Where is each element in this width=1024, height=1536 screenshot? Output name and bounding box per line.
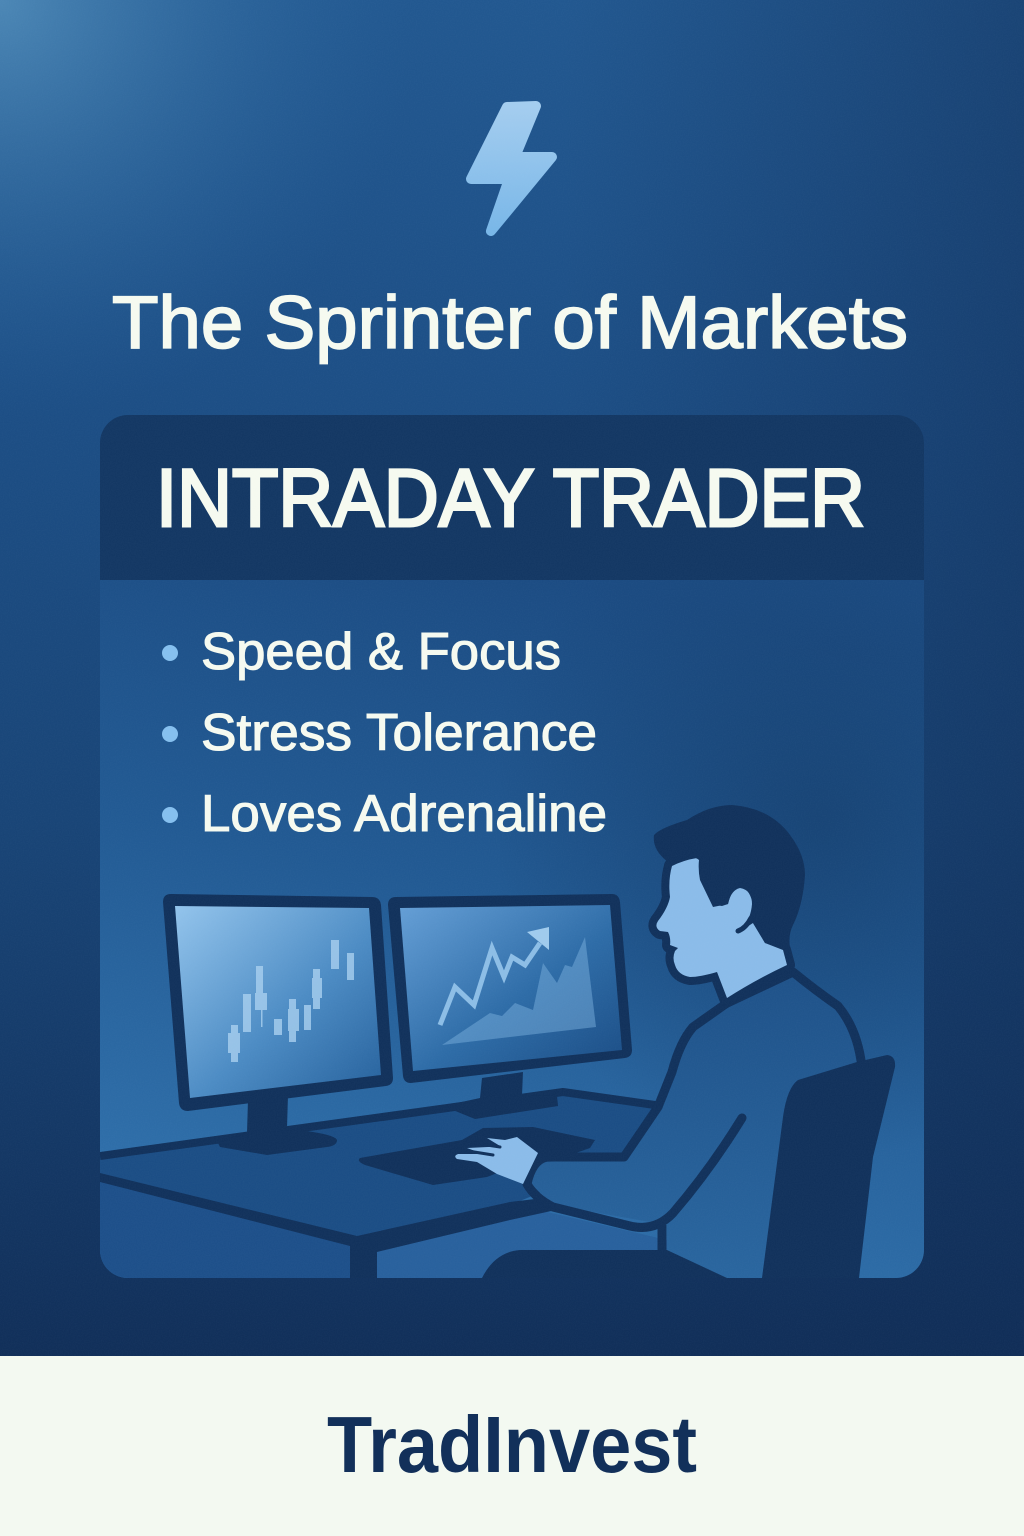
panel header bbox=[100, 415, 924, 580]
hair bbox=[654, 805, 805, 948]
hand bbox=[455, 1137, 538, 1184]
title: The Sprinter of Markets bbox=[112, 281, 908, 364]
desk front left bbox=[100, 1180, 350, 1278]
bullet list bbox=[162, 623, 607, 843]
desk front right bbox=[377, 1208, 667, 1278]
bullet: loves adrenaline bbox=[162, 793, 606, 832]
screen bbox=[400, 905, 622, 1071]
monitor: candlestick chart bbox=[163, 894, 393, 1155]
heading: INTRADAY TRADER bbox=[156, 453, 865, 544]
head bbox=[654, 805, 805, 998]
screen bbox=[175, 906, 381, 1098]
trader bbox=[455, 805, 895, 1278]
icon: lightning bolt bbox=[471, 106, 552, 231]
frame bbox=[388, 894, 632, 1083]
bullet: stress tolerance: Stress Tolerance bbox=[201, 704, 597, 762]
desk top bbox=[100, 1092, 655, 1240]
chair bbox=[762, 1055, 895, 1278]
sleeve outline bbox=[527, 1003, 742, 1227]
frame bbox=[163, 894, 393, 1111]
panel body bbox=[100, 580, 924, 1278]
panel right shading bbox=[594, 655, 924, 1060]
stand bbox=[456, 1072, 558, 1119]
monitor: line chart bbox=[388, 894, 632, 1119]
torso bbox=[532, 1086, 779, 1278]
seat bbox=[482, 1250, 727, 1278]
trend arrowhead bbox=[527, 927, 549, 950]
face and neck bbox=[656, 858, 787, 998]
bullet: loves adrenaline: Loves Adrenaline bbox=[201, 785, 607, 843]
shoulder outline bbox=[723, 972, 862, 1068]
stand bbox=[218, 1095, 337, 1155]
trend line bbox=[440, 943, 540, 1025]
desk leg bbox=[350, 1250, 377, 1278]
footer band bbox=[0, 1356, 1024, 1536]
area chart bbox=[442, 937, 596, 1045]
ear inner bbox=[738, 918, 751, 931]
candles bbox=[228, 940, 354, 1062]
waist line bbox=[658, 1225, 666, 1252]
desk back edge bbox=[100, 1092, 655, 1156]
desk front edge right bbox=[354, 1199, 551, 1252]
desk front edge left bbox=[100, 1173, 357, 1246]
keyboard bbox=[359, 1127, 595, 1185]
panel: intraday trader bbox=[100, 415, 924, 1280]
desk bbox=[100, 1092, 667, 1280]
bullet: stress tolerance bbox=[162, 712, 596, 751]
logo wordmark: TradInvest bbox=[327, 1400, 697, 1489]
bullet: speed and focus: Speed & Focus bbox=[201, 623, 561, 681]
